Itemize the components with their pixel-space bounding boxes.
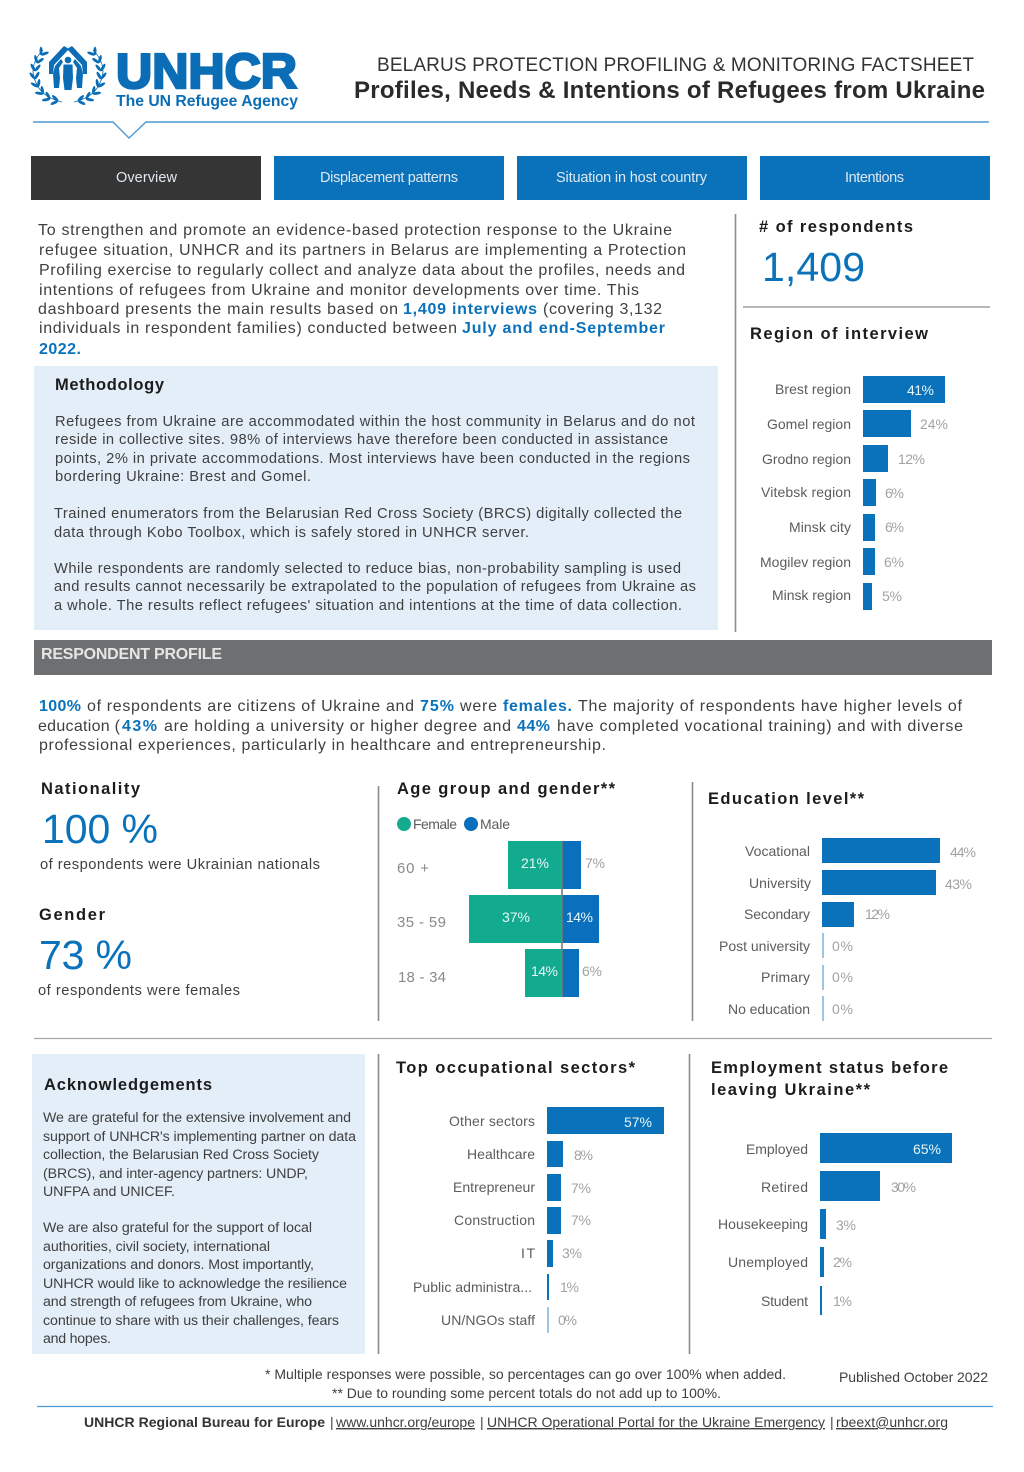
bar chart: education level: 0% (832, 969, 853, 985)
stat: nationality (40, 780, 320, 873)
text: respondent profile summary: of respondents are citizens of Ukraine and (87, 698, 414, 715)
stat: gender: Gender (39, 906, 106, 924)
stat: gender (38, 906, 240, 999)
section banner: respondent profile (34, 640, 992, 675)
intro paragraph: individuals in respondent families) conducted between (39, 320, 457, 337)
header rule with notch (33, 122, 989, 138)
icon: UNHCR emblem (29, 46, 107, 106)
bar chart: region of interview: Minsk region (772, 587, 851, 603)
intro paragraph: Profiling exercise to regularly collect and analyze data about the profiles, needs and (39, 262, 685, 279)
chart: age group and gender pyramid (397, 780, 616, 997)
header title: BELARUS PROTECTION PROFILING & MONITORING FACTSHEET (377, 55, 974, 76)
stat: gender: of respondents were females (38, 983, 240, 999)
bar chart: education level: Secondary (744, 906, 810, 922)
bar chart: top occupational sectors: Healthcare (467, 1146, 535, 1162)
bar chart: employment status before leaving Ukraine: 3% (836, 1217, 856, 1233)
stat: gender: 73 % (39, 932, 132, 978)
tab: Overview (31, 156, 261, 200)
heading: employment status: leaving Ukraine** (711, 1081, 871, 1099)
stat: number of respondents: # of respondents (759, 218, 913, 236)
text: respondent profile summary: were (459, 698, 497, 715)
legend (397, 816, 510, 832)
tagline: The UN Refugee Agency (116, 93, 298, 110)
text: methodology body: While respondents are randomly selected to reduce bias, non-probability sampling is used (54, 561, 681, 577)
footer links: rbeext@unhcr.org (836, 1414, 948, 1430)
tab: Situation in host country (517, 156, 747, 200)
bar chart: top occupational sectors: 3% (562, 1245, 582, 1261)
tab: Intentions (760, 156, 990, 200)
bar chart: employment status before leaving Ukraine: Retired (761, 1179, 808, 1195)
text: methodology body: points, 2% in private accommodations. Most interviews have been conducted in the regions (55, 451, 690, 467)
bar chart: education level: Primary (761, 969, 810, 985)
bar chart: top occupational sectors: UN/NGOs staff (441, 1312, 535, 1328)
bar chart: top occupational sectors: 8% (574, 1147, 593, 1163)
text: respondent profile summary: 100% (39, 698, 81, 715)
footnotes: ** Due to rounding some percent totals do not add up to 100%. (332, 1385, 721, 1401)
intro paragraph: 2022. (39, 341, 81, 358)
section banner: respondent profile: RESPONDENT PROFILE (41, 646, 222, 663)
heading: methodology: Methodology (55, 376, 165, 394)
chart: age group and gender pyramid: 60 + (397, 860, 429, 877)
text: acknowledgements body: UNHCR would like to acknowledge the resilience (43, 1276, 347, 1292)
text: methodology body: reside in collective sites. 98% of interviews have therefore been conducted in assistance (55, 432, 668, 448)
chart: age group and gender pyramid: 37% (502, 909, 530, 925)
bar chart: education level: 0% (832, 938, 853, 954)
footer links: UNHCR Regional Bureau for Europe (84, 1414, 325, 1430)
bar chart: region of interview: 6% (885, 519, 904, 535)
intro paragraph: refugee situation, UNHCR and its partners in Belarus are implementing a Protection (39, 242, 686, 259)
bar chart: employment status before leaving Ukraine: Student (761, 1293, 808, 1309)
bar chart: employment status before leaving Ukraine: Employed (746, 1141, 808, 1157)
bar chart: education level: No education (728, 1001, 810, 1017)
bar chart: region of interview: 5% (882, 588, 902, 604)
text: acknowledgements body: We are also grateful for the support of local (43, 1220, 312, 1236)
bar chart: region of interview: 6% (884, 554, 904, 570)
header title (354, 55, 985, 104)
intro paragraph: dashboard presents the main results based on (38, 301, 398, 318)
text: acknowledgements body: support of UNHCR's implementing partner on data (43, 1129, 356, 1145)
bar chart: top occupational sectors: 7% (571, 1212, 591, 1228)
intro paragraph: To strengthen and promote an evidence-based protection response to the Ukraine (38, 222, 672, 239)
footnotes: * Multiple responses were possible, so percentages can go over 100% when added. (265, 1366, 786, 1382)
text: respondent profile summary: professional experiences, particularly in healthcare and entrepreneurship. (39, 737, 606, 754)
text: methodology body: and results cannot necessarily be extrapolated to the population of refugees from Ukraine as (54, 579, 696, 595)
bar chart: region of interview: Minsk city (789, 519, 851, 535)
footnotes (265, 1366, 786, 1401)
text: acknowledgements body (43, 1110, 356, 1347)
bar chart: education level: Post university (719, 938, 810, 954)
bar chart: education level: Vocational (745, 843, 810, 859)
chart: age group and gender pyramid: 6% (582, 963, 602, 979)
footer links: | (830, 1414, 834, 1430)
text: methodology body: bordering Ukraine: Brest and Gomel. (55, 469, 311, 485)
text: acknowledgements body: and hopes. (43, 1331, 111, 1347)
stat: nationality: 100 % (42, 806, 158, 852)
text: respondent profile summary: 43% (122, 718, 157, 735)
bar chart: region of interview: Brest region (775, 381, 851, 397)
stat: nationality: Nationality (41, 780, 141, 798)
bar chart: education level: 43% (945, 876, 972, 892)
legend: Female (413, 816, 457, 832)
text: acknowledgements body: We are grateful for the extensive involvement and (43, 1110, 351, 1126)
bar chart: region of interview (750, 325, 948, 610)
chart: age group and gender pyramid: 14% (566, 909, 593, 925)
wordmark: UNHCR: UNHCR (116, 45, 297, 99)
tab: Situation in host country: Situation in host country (556, 170, 708, 186)
heading: employment status: Employment status before (711, 1059, 948, 1077)
heading: age group and gender: Age group and gender** (397, 780, 616, 798)
text: respondent profile summary: females. (503, 698, 572, 715)
header title: Profiles, Needs & Intentions of Refugees from Ukraine (354, 77, 985, 104)
tab: Intentions: Intentions (845, 170, 904, 186)
text: respondent profile summary: The majority of respondents have higher levels of (578, 698, 963, 715)
stat: number of respondents: 1,409 (762, 244, 865, 290)
panel: acknowledgements (32, 1054, 365, 1354)
text: acknowledgements body: (BRCS), and inter-agency partners: UNDP, (43, 1166, 308, 1182)
heading: employment status (711, 1059, 948, 1099)
text: methodology body (54, 414, 696, 614)
bar chart: top occupational sectors: 1% (560, 1279, 579, 1295)
bar chart: education level: University (749, 875, 811, 891)
bar chart: education level: 12% (865, 906, 890, 922)
text: methodology body: Refugees from Ukraine are accommodated within the host community in Belarus and do not (55, 414, 695, 430)
text: acknowledgements body: authorities, civil society, international (43, 1239, 270, 1255)
publication date: Published October 2022 (839, 1369, 988, 1385)
tab: Overview: Overview (116, 170, 178, 186)
bar chart: region of interview: 41% (907, 382, 934, 398)
bar chart: education level (708, 790, 976, 1021)
text: methodology body: data through Kobo Toolbox, which is safely stored in UNHCR server. (54, 525, 529, 541)
intro paragraph: intentions of refugees from Ukraine and monitor developments over time. This (39, 282, 639, 299)
footer links (84, 1414, 948, 1430)
text: respondent profile summary (38, 698, 963, 754)
bar chart: top occupational sectors: IT (521, 1245, 535, 1261)
bar chart: top occupational sectors: Entrepreneur (453, 1179, 535, 1195)
bar chart: education level: 44% (950, 844, 976, 860)
bar chart: top occupational sectors (396, 1059, 664, 1333)
footer links: | (480, 1414, 484, 1430)
stat: nationality: of respondents were Ukrainian nationals (40, 857, 320, 873)
bar chart: top occupational sectors: Public administra... (413, 1279, 532, 1295)
bar chart: top occupational sectors: Construction (454, 1212, 535, 1228)
tab: Displacement patterns: Displacement patterns (320, 170, 458, 186)
intro paragraph: 1,409 interviews (403, 301, 537, 318)
chart: age group and gender pyramid: 21% (521, 855, 549, 871)
bar chart: employment status before leaving Ukraine: 2% (833, 1254, 852, 1270)
legend: Male (480, 816, 510, 832)
footer links: | (330, 1414, 334, 1430)
tab: Displacement patterns (274, 156, 504, 200)
text: methodology body: Trained enumerators from the Belarusian Red Cross Society (BRCS) digitally collected the (54, 506, 682, 522)
bar chart: top occupational sectors: 7% (571, 1180, 591, 1196)
chart: age group and gender pyramid: 18 - 34 (398, 969, 446, 986)
intro paragraph: (covering 3,132 (543, 301, 662, 318)
bar chart: top occupational sectors: Other sectors (449, 1113, 535, 1129)
bar chart: region of interview: 24% (920, 416, 948, 432)
bar chart: education level: 0% (832, 1001, 853, 1017)
navigation tabs (31, 156, 990, 200)
intro paragraph (38, 222, 686, 358)
chart: age group and gender pyramid: 14% (531, 963, 558, 979)
text: acknowledgements body: collection, the Belarusian Red Cross Society (43, 1147, 320, 1163)
text: respondent profile summary: have completed vocational training) and with diverse (557, 718, 963, 735)
footer links: www.unhcr.org/europe (335, 1414, 475, 1430)
text: acknowledgements body: continue to share with us their challenges, fears (43, 1313, 339, 1329)
text: respondent profile summary: 44% (517, 718, 550, 735)
chart: age group and gender pyramid: 35 - 59 (397, 914, 446, 931)
bar chart: top occupational sectors: 0% (558, 1312, 577, 1328)
bar chart: employment status before leaving Ukraine: Unemployed (728, 1254, 808, 1270)
text: acknowledgements body: and strength of refugees from Ukraine, who (43, 1294, 312, 1310)
bar chart: employment status before leaving Ukraine (711, 1059, 952, 1315)
bar chart: employment status before leaving Ukraine: 65% (913, 1141, 941, 1157)
text: respondent profile summary: education ( (38, 718, 121, 735)
text: methodology body: a whole. The results reflect refugees' situation and intentions at the time of data collection. (54, 598, 682, 614)
bar chart: region of interview: 6% (885, 485, 904, 501)
bar chart: top occupational sectors: 57% (624, 1114, 652, 1130)
bar chart: region of interview: Gomel region (767, 416, 851, 432)
heading: acknowledgements: Acknowledgements (44, 1076, 212, 1094)
bar chart: employment status before leaving Ukraine: Housekeeping (718, 1216, 808, 1232)
stat: number of respondents (759, 218, 913, 290)
bar chart: region of interview: Vitebsk region (761, 484, 851, 500)
heading: top occupational sectors: Top occupational sectors* (396, 1059, 636, 1077)
text: respondent profile summary: are holding a university or higher degree and (164, 718, 511, 735)
panel: methodology (34, 366, 718, 630)
text: respondent profile summary: 75% (420, 698, 454, 715)
heading: region of interview: Region of interview (750, 325, 928, 343)
footer links: UNHCR Operational Portal for the Ukraine Emergency (487, 1414, 825, 1430)
bar chart: employment status before leaving Ukraine: 1% (833, 1293, 852, 1309)
header: UNHCR logo (29, 45, 298, 110)
bar chart: region of interview: Grodno region (762, 451, 851, 467)
text: acknowledgements body: organizations and donors. Most importantly, (43, 1257, 314, 1273)
text: acknowledgements body: UNFPA and UNICEF. (43, 1184, 175, 1200)
bar chart: region of interview: Mogilev region (760, 554, 851, 570)
chart: age group and gender pyramid: 7% (585, 855, 605, 871)
heading: education level: Education level** (708, 790, 865, 808)
intro paragraph: July and end-September (462, 320, 665, 337)
bar chart: region of interview: 12% (898, 451, 925, 467)
bar chart: employment status before leaving Ukraine: 30% (891, 1179, 916, 1195)
